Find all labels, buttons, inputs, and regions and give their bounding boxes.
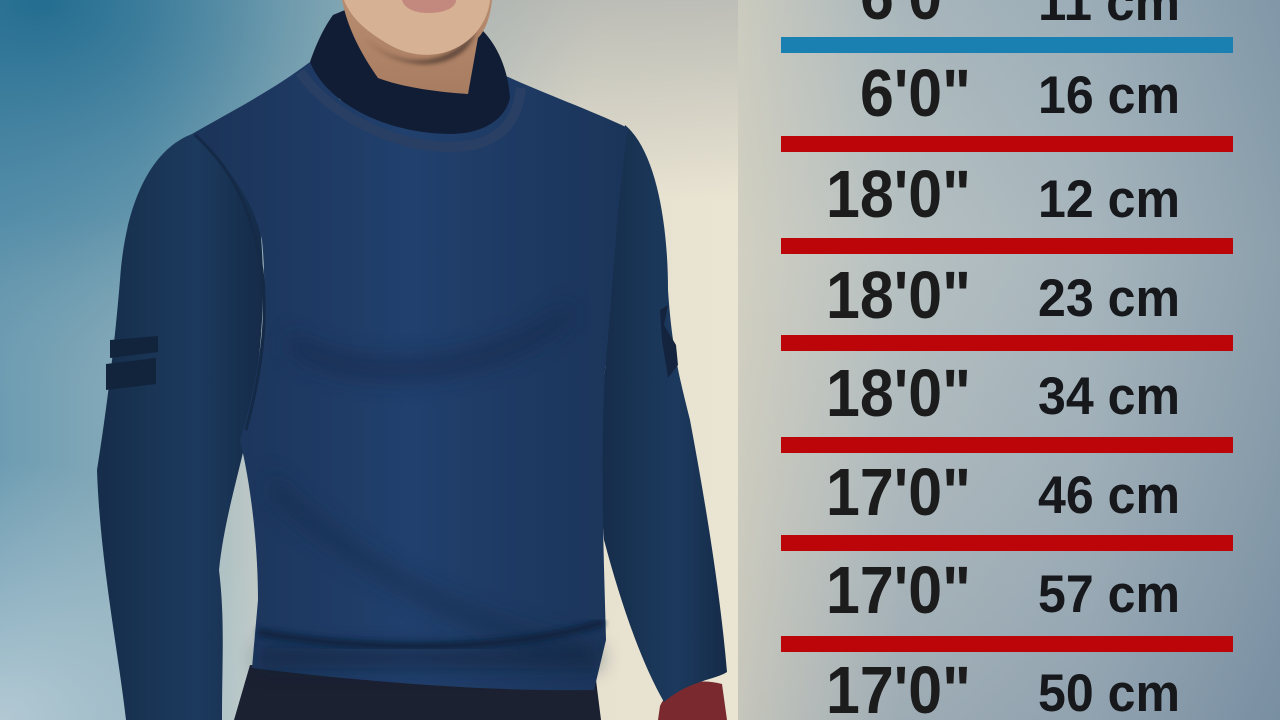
collar ring <box>300 72 521 147</box>
row 3 <box>826 157 1180 232</box>
row 4 <box>826 258 1180 333</box>
torso <box>192 62 628 690</box>
row 6 <box>826 455 1180 530</box>
row 6: 17'0" <box>826 455 971 530</box>
divider: blue <box>781 37 1233 53</box>
divider: red <box>781 136 1233 152</box>
pants <box>234 665 601 720</box>
face lower <box>344 0 490 55</box>
divider: red <box>781 636 1233 652</box>
hand <box>658 681 727 720</box>
row 2: 6'0" <box>860 56 971 131</box>
row 7: 57 cm <box>1038 565 1180 624</box>
sweater hem seam <box>258 622 604 646</box>
right sleeve detail <box>660 305 678 378</box>
row 5 <box>826 356 1180 431</box>
divider: red <box>781 437 1233 453</box>
panel: measurement background <box>738 0 1280 720</box>
divider: red <box>781 238 1233 254</box>
shoulder seam <box>195 135 264 430</box>
row 3: 18'0" <box>826 157 971 232</box>
row 7 <box>826 553 1180 628</box>
row 8 <box>826 653 1180 720</box>
row 2 <box>860 56 1180 131</box>
sleeve patch <box>106 336 158 390</box>
neck <box>342 0 492 94</box>
turtleneck <box>310 10 510 134</box>
right arm <box>600 125 727 702</box>
row 5: 18'0" <box>826 356 971 431</box>
divider: red <box>781 335 1233 351</box>
row 7: 17'0" <box>826 553 971 628</box>
chart: height and measurement table <box>781 0 1233 720</box>
row 5: 34 cm <box>1038 367 1180 426</box>
body shading <box>258 300 600 668</box>
row 4: 23 cm <box>1038 269 1180 328</box>
row 4: 18'0" <box>826 258 971 333</box>
background <box>0 0 740 720</box>
row 3: 12 cm <box>1038 170 1180 229</box>
row 2: 16 cm <box>1038 66 1180 125</box>
left arm <box>97 134 263 720</box>
row 6: 46 cm <box>1038 466 1180 525</box>
lips <box>402 0 456 13</box>
beard shadow <box>365 30 476 64</box>
figure: man in navy sweater <box>97 0 727 720</box>
row 1 partial <box>860 0 1180 34</box>
divider: red <box>781 535 1233 551</box>
